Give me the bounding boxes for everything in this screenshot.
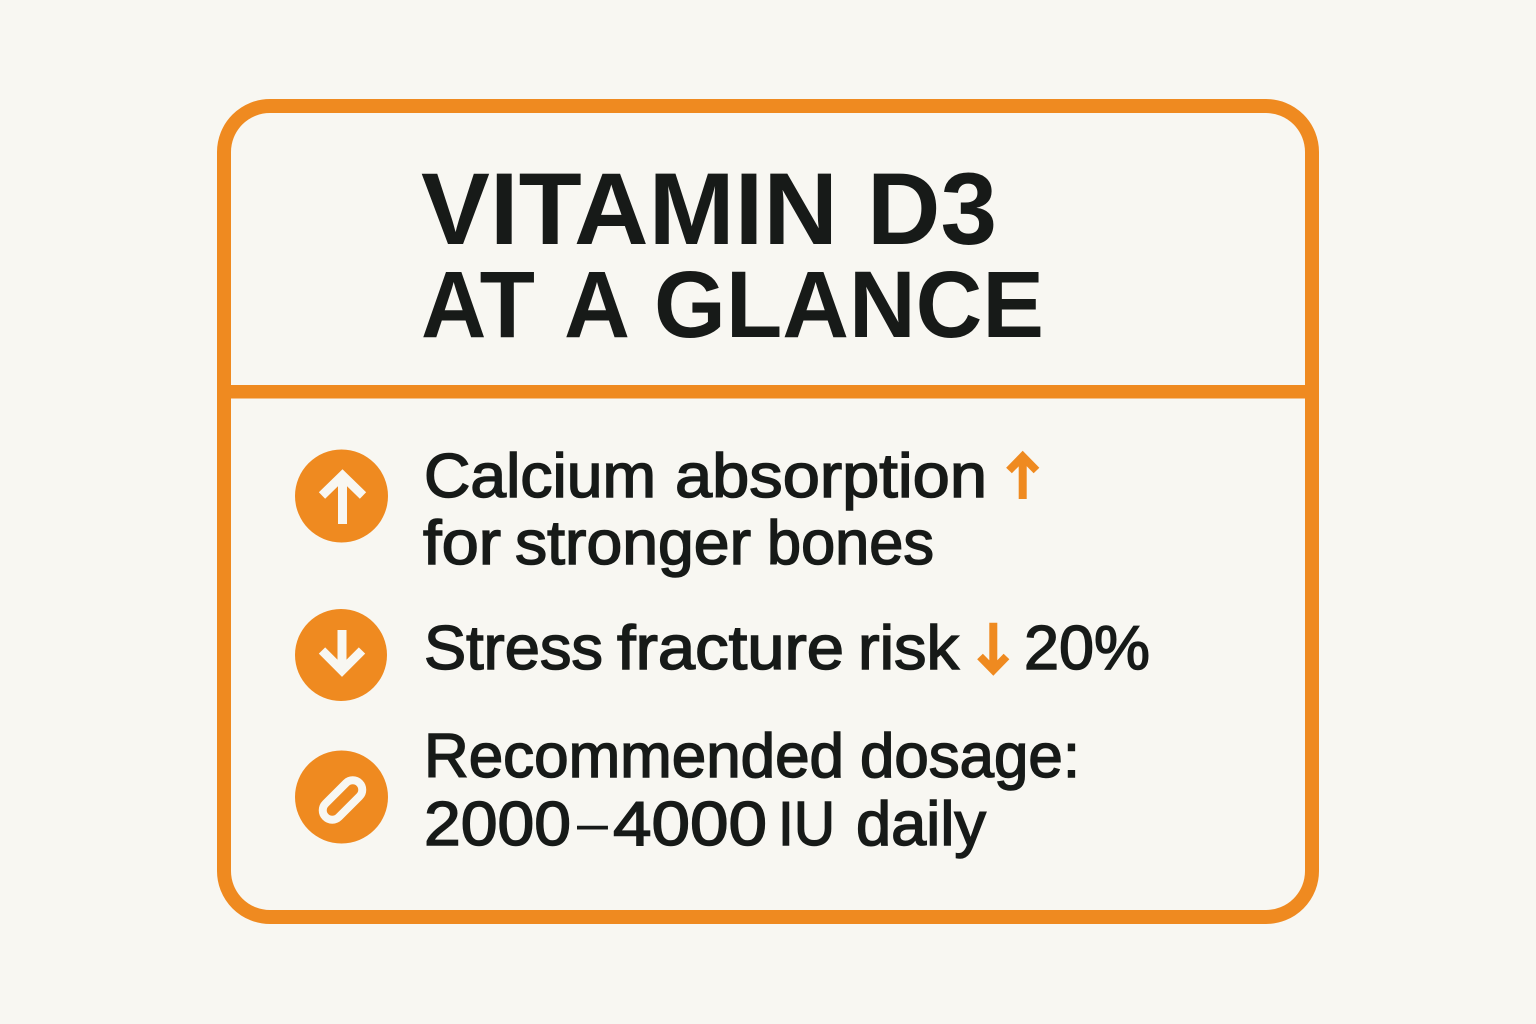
- text: calcium absorption: Calcium: [424, 441, 656, 511]
- title: A: [564, 252, 630, 358]
- text: stress fracture risk: Stress: [424, 613, 603, 683]
- text: recommended dosage: daily: [856, 789, 987, 859]
- title: [421, 152, 1044, 358]
- text: recommended dosage: dosage:: [860, 721, 1080, 791]
- text: calcium absorption: stronger: [515, 508, 751, 578]
- icon: small up arrow: [1009, 456, 1036, 499]
- icon: small down arrow: [980, 623, 1006, 670]
- text: recommended dosage: [424, 721, 1080, 859]
- icon: up arrow circle: [295, 450, 388, 542]
- title: AT: [421, 252, 535, 358]
- text: calcium absorption: bones: [767, 508, 934, 578]
- text: recommended dosage: 4000: [613, 789, 767, 859]
- panel: card: [224, 106, 1312, 917]
- text: recommended dosage: Recommended: [424, 721, 844, 791]
- text: recommended dosage: IU: [778, 789, 835, 859]
- icon: down arrow circle: [295, 609, 387, 701]
- text: stress fracture risk: 20%: [1024, 613, 1150, 683]
- text: recommended dosage: 2000: [424, 789, 571, 859]
- text: recommended dosage: –: [577, 791, 609, 854]
- text: calcium absorption: [423, 441, 1036, 578]
- title: GLANCE: [654, 252, 1044, 358]
- text: stress fracture risk: fracture: [617, 613, 844, 683]
- title: VITAMIN: [421, 152, 838, 266]
- icon: pill circle: [295, 750, 388, 844]
- text: stress fracture risk: [424, 613, 1150, 683]
- text: calcium absorption: for: [423, 508, 501, 578]
- text: calcium absorption: absorption: [675, 441, 987, 511]
- text: stress fracture risk: risk: [858, 613, 960, 683]
- title: D3: [867, 152, 997, 266]
